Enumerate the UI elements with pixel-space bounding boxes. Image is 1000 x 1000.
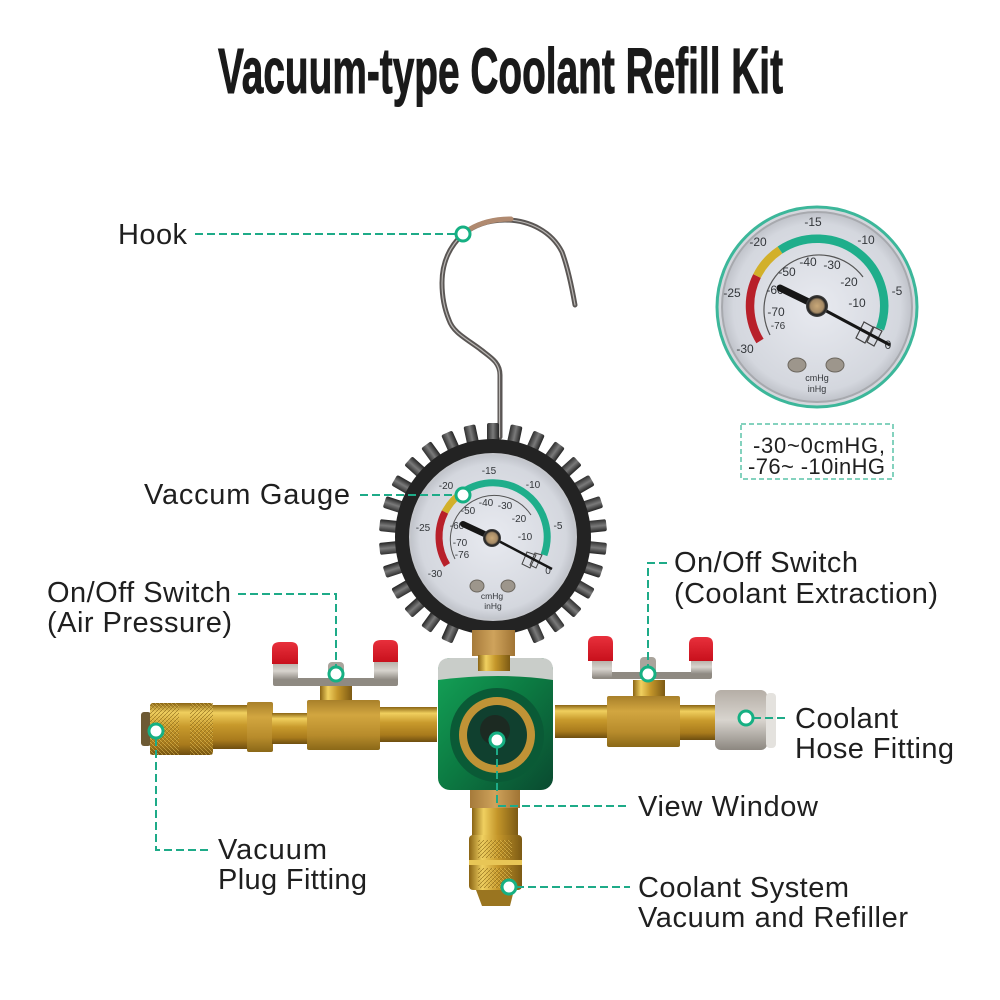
gauge numbers: -5 [554,521,563,532]
callout: coolant extraction switch [641,547,938,681]
gauge numbers: -70 [453,538,468,549]
gauge screws [470,580,515,592]
right valve assembly [555,636,776,750]
gauge numbers: -20 [439,481,454,492]
icon: hook [442,219,575,437]
inset needle [780,288,890,346]
callout: coolant system [502,872,908,934]
gauge numbers: -76 [455,550,470,561]
inset numbers: -5 [892,284,903,298]
callout: air pressure switch: (Air Pressure) [47,607,232,639]
callout: coolant system: Vacuum and Refiller [638,902,908,934]
inset numbers: -70 [767,305,785,319]
gauge numbers: -30 [498,501,513,512]
inset screws [788,358,844,372]
inset range label: -30~0cmHG, [753,433,885,458]
inset numbers: -20 [840,275,858,289]
callout: vacuum plug fitting [149,724,367,896]
inset gauge [717,207,917,407]
inset numbers: -10 [848,296,866,310]
gauge rubber fins [379,423,607,644]
callout: coolant hose fitting: Hose Fitting [795,733,954,765]
inset numbers: -60 [766,283,784,297]
inset numbers: -50 [778,265,796,279]
callout: vacuum plug fitting: Vacuum [218,834,327,866]
callout: coolant extraction switch: On/Off Switch [674,547,858,579]
gauge stem [472,630,515,673]
inset numbers: -20 [749,235,767,249]
gauge colour arcs [439,483,547,565]
gauge numbers: -30 [428,569,443,580]
gauge numbers: -40 [479,498,494,509]
inset numbers [723,215,903,394]
callout: vacuum gauge [144,479,470,511]
gauge numbers: -25 [416,523,431,534]
gauge needle [463,524,552,569]
gauge numbers: -15 [482,466,497,477]
green manifold block [438,657,553,790]
gauge numbers: 0 [545,566,551,577]
inset numbers: -25 [723,286,741,300]
inset range label [741,424,893,479]
callout: coolant hose fitting: Coolant [795,703,898,735]
inset numbers: -10 [857,233,875,247]
gauge numbers [416,466,563,611]
inset range label: -76~ -10inHG [748,454,885,479]
callout: air pressure switch [47,577,343,681]
callout: view window: View Window [638,791,819,823]
lower coupling [469,788,522,906]
vacuum gauge [379,423,607,644]
inset numbers: -30 [736,342,754,356]
inset numbers: -76 [771,321,786,332]
left valve assembly [141,640,437,755]
gauge numbers: -10 [518,532,533,543]
gauge numbers: -20 [512,514,527,525]
callout: hook [118,219,470,251]
inset numbers: 0 [885,338,892,352]
callout: view window [490,733,819,823]
gauge numbers: -50 [461,506,476,517]
callout: hook: Hook [118,219,188,251]
callout: vacuum gauge: Vaccum Gauge [144,479,350,511]
gauge numbers: cmHg [481,591,503,601]
right switch handle [588,636,713,679]
inset numbers: cmHg [805,373,829,383]
inset numbers: inHg [808,384,826,394]
gauge numbers: -60 [450,521,465,532]
callout: coolant hose fitting [739,703,954,765]
gauge numbers: -10 [526,480,541,491]
callout: air pressure switch: On/Off Switch [47,577,231,609]
left switch handle [272,640,398,686]
inset colour arcs [750,239,884,341]
gauge numbers: inHg [484,601,502,611]
callout: vacuum plug fitting: Plug Fitting [218,864,367,896]
callout: coolant system: Coolant System [638,872,849,904]
inset numbers: -30 [823,258,841,272]
inset numbers: -15 [804,215,822,229]
inset numbers: -40 [799,255,817,269]
callout: coolant extraction switch: (Coolant Extraction) [674,578,938,610]
